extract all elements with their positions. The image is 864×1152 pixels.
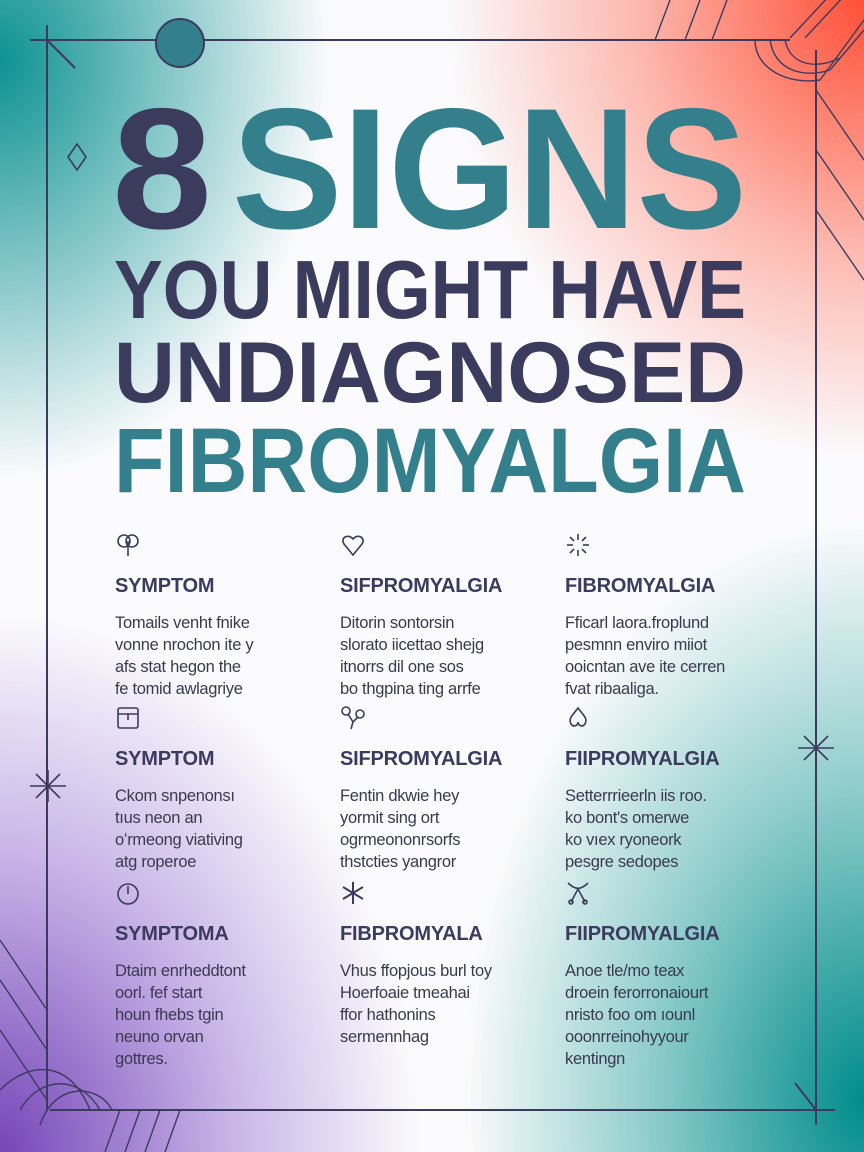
sign 6: Setterrrieerln iis roo. <box>565 787 707 805</box>
sign 4: oʻrmeong viativing <box>115 831 243 849</box>
sign 2: SIFPROMYALGIA <box>340 575 502 597</box>
sign 8 <box>340 882 492 1046</box>
sign 8: Vhus ffopjous burl toy <box>340 962 492 980</box>
sign 7: houn fhebs tgin <box>115 1006 223 1024</box>
sign 4: tıus neon an <box>115 809 202 827</box>
sign 2: Ditorin sontorsin <box>340 614 454 632</box>
sign 6 <box>565 706 720 871</box>
sign 6: FIIPROMYALGIA <box>565 748 719 770</box>
sign 5: thstcties yangror <box>340 853 456 871</box>
sign 2: itnorrs dil one sos <box>340 658 464 676</box>
sign 3: Fficarl laora.froplund <box>565 614 709 632</box>
sign 5: ogrmeononrsorfs <box>340 831 460 849</box>
sign 5 <box>340 706 502 871</box>
sign 1: SYMPTOM <box>115 575 214 597</box>
sign 5: SIFPROMYALGIA <box>340 748 502 770</box>
sign 9: kentingn <box>565 1050 625 1068</box>
sparkles <box>30 770 66 802</box>
sign 8: FIBPROMYALA <box>340 923 483 945</box>
sign 4 <box>115 707 243 871</box>
sign 4: atg roperoe <box>115 853 196 871</box>
sign 1 <box>115 534 254 698</box>
sign 2: slorato iicettao shejg <box>340 636 484 654</box>
sign 1: fe tomid awlagriye <box>115 680 243 698</box>
sign 3: ooicntan ave ite cerren <box>565 658 725 676</box>
title: YOU MIGHT HAVE <box>114 243 746 336</box>
sign 1: vonne nrochon ite y <box>115 636 253 654</box>
title: 8 <box>112 73 212 265</box>
sign 9: nristo foo om ıounl <box>565 1006 695 1024</box>
sign 6: ko bont's omerwe <box>565 809 689 827</box>
diamond ornament <box>68 144 86 170</box>
title: FIBROMYALGIA <box>114 410 746 512</box>
sign 3: FIBROMYALGIA <box>565 575 715 597</box>
sign 1: afs stat hegon the <box>115 658 241 676</box>
sign 2 <box>340 536 502 698</box>
sign 4: SYMPTOM <box>115 748 214 770</box>
sign 3 <box>565 534 725 698</box>
sign 6: ko vıex ryoneork <box>565 831 681 849</box>
sign 9 <box>565 882 720 1068</box>
sign 3: fvat ribaaliga. <box>565 680 659 698</box>
title: SIGNS <box>232 73 747 265</box>
sign 8: ffor hathonins <box>340 1006 436 1024</box>
sign 6: pesgre sedopes <box>565 853 678 871</box>
sign 7: neuno orvan <box>115 1028 203 1046</box>
circle ornament <box>156 19 204 67</box>
sign 1: Tomails venht fnike <box>115 614 250 632</box>
sign 9: Anoe tle/mo teax <box>565 962 684 980</box>
sign 7 <box>115 883 246 1068</box>
sign 5: Fentin dkwie hey <box>340 787 459 805</box>
sign 7: oorl. fef start <box>115 984 202 1002</box>
sign 2: bo thgpina ting arrfe <box>340 680 480 698</box>
sign 9: ooonrreinohyyour <box>565 1028 689 1046</box>
sign 3: pesmnn enviro miiot <box>565 636 707 654</box>
sign 8: sermennhag <box>340 1028 429 1046</box>
title <box>112 73 747 512</box>
sign 5: yormit sing ort <box>340 809 439 827</box>
sign 7: SYMPTOMA <box>115 923 229 945</box>
sign 9: droein ferorronaiourt <box>565 984 708 1002</box>
sign 9: FIIPROMYALGIA <box>565 923 719 945</box>
sign 4: Ckom snpenonsı <box>115 787 235 805</box>
sign 7: Dtaim enrheddtont <box>115 962 246 980</box>
title: UNDIAGNOSED <box>114 325 746 421</box>
sign 7: gottres. <box>115 1050 168 1068</box>
sign 8: Hoerfoaie tmeahai <box>340 984 470 1002</box>
